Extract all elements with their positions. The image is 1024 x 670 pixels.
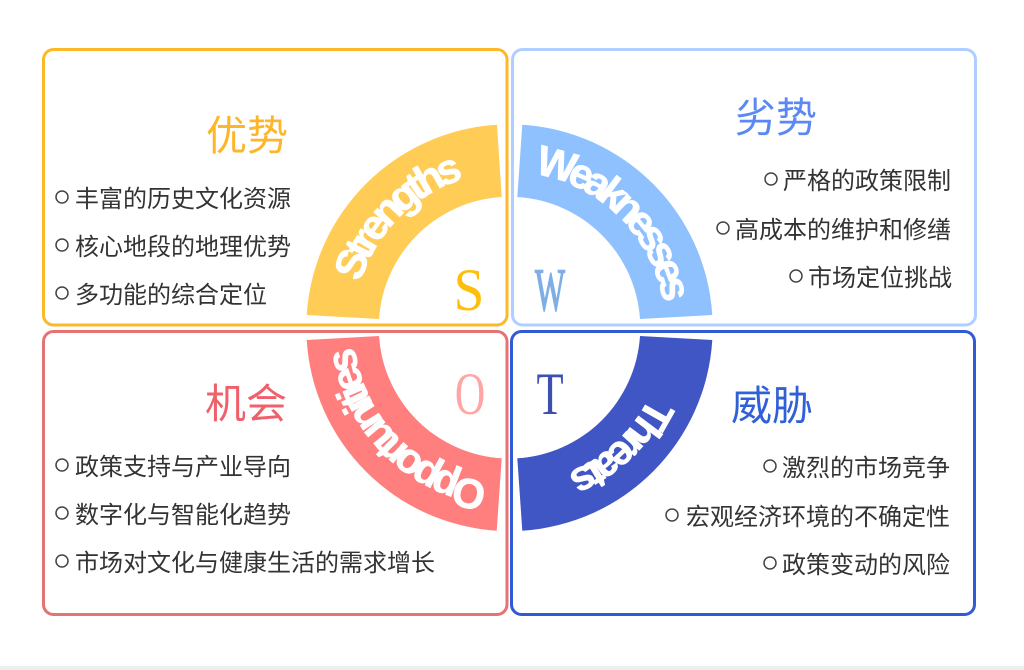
heading: weaknesses: 劣势 (735, 95, 817, 141)
panel: weaknesses (512, 50, 976, 325)
letter: T: T (536, 362, 564, 428)
arc: strengths: Strengths (336, 160, 461, 279)
list: threats items: 政策变动的风险 (782, 552, 950, 579)
list: threats items: 宏观经济环境的不确定性 (686, 504, 950, 531)
heading: threats: 威胁 (731, 383, 813, 429)
panel: strengths (44, 50, 507, 325)
arc: weaknesses: Weaknesses (540, 144, 684, 301)
panel: opportunities (44, 332, 507, 614)
list: strengths items: 多功能的综合定位 (75, 282, 267, 309)
list: threats items: 激烈的市场竞争 (782, 455, 950, 482)
arc: threats (517, 336, 712, 531)
list: opportunities items: 政策支持与产业导向 (75, 454, 291, 481)
letter: S: S (454, 258, 484, 324)
list: strengths items (56, 186, 291, 309)
list: opportunities items (56, 454, 435, 577)
arc: strengths (306, 124, 502, 319)
panel: threats (512, 332, 974, 614)
list: weaknesses items: 严格的政策限制 (783, 168, 951, 195)
list: strengths items: 丰富的历史文化资源 (75, 186, 291, 213)
heading: strengths: 优势 (206, 113, 288, 159)
list: weaknesses items (717, 168, 952, 292)
list: weaknesses items: 市场定位挑战 (808, 265, 952, 292)
arc: opportunities: Opportunities (333, 349, 484, 509)
list: strengths items: 核心地段的地理优势 (75, 234, 291, 261)
list: opportunities items: 数字化与智能化趋势 (75, 502, 291, 529)
heading: opportunities: 机会 (205, 381, 287, 427)
list: weaknesses items: 高成本的维护和修缮 (735, 217, 951, 244)
list: opportunities items: 市场对文化与健康生活的需求增长 (75, 550, 435, 577)
list: threats items (666, 455, 950, 579)
letter: O: O (455, 362, 485, 428)
letter: W: W (535, 258, 565, 324)
arc: threats: Threats (570, 404, 676, 490)
